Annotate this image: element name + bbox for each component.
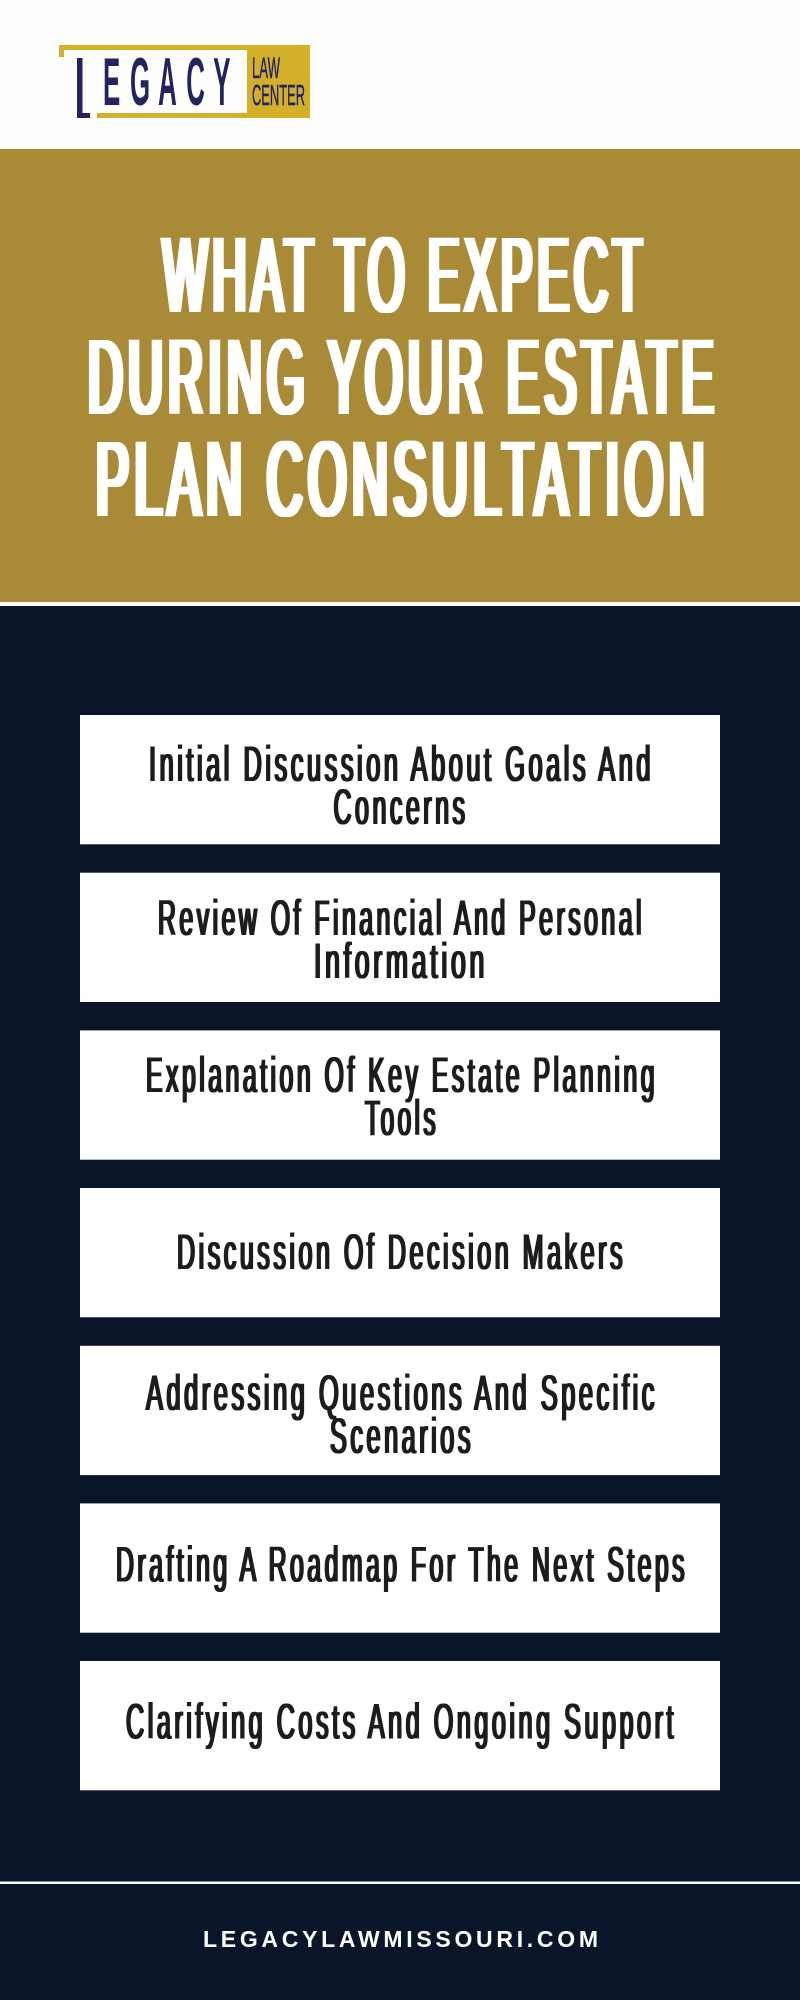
header band with logo: CENTER [252,80,305,112]
item 7 [80,1661,720,1790]
item 2 [80,873,720,1002]
item 1 [80,715,720,844]
item 3: Tools [365,1090,439,1146]
title panel [0,149,800,602]
item 5 [80,1346,720,1475]
logo: Legacy Law Center: EGACY [103,43,230,120]
item 5: Scenarios [330,1408,474,1464]
logo: Legacy Law Center [59,43,310,120]
logo: Legacy Law Center: LAW [252,52,280,85]
item 6 [80,1503,720,1633]
item 1: Concerns [334,779,468,835]
item 3 [80,1030,720,1160]
title [88,215,719,539]
item 2: Information [314,933,488,989]
footer website: LEGACYLAWMISSOURI.COM [203,1926,598,1952]
header band with logo [0,0,800,149]
item 4 [80,1188,720,1317]
